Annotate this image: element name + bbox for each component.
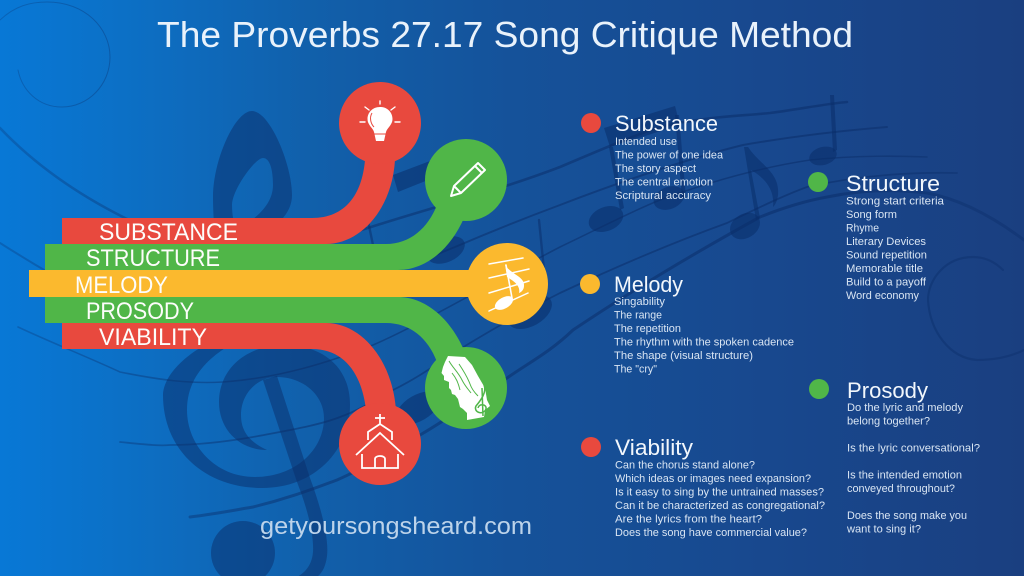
band: substance <box>62 160 395 246</box>
panel: structure: Literary Devices <box>846 236 927 248</box>
panel: prosody: Is the intended emotion <box>847 470 962 482</box>
band: structure <box>45 205 464 272</box>
panel: structure: Structure <box>846 171 940 196</box>
panel: prosody: Prosody <box>847 378 928 403</box>
panel: structure: Sound repetition <box>846 250 927 262</box>
panel: structure: Strong start criteria <box>846 196 945 208</box>
panel: prosody: Is the lyric conversational? <box>847 442 980 454</box>
panel: prosody: Do the lyric and melody <box>847 402 963 414</box>
panel: structure: Memorable title <box>846 263 923 275</box>
band: viability <box>62 323 396 410</box>
panel: melody: The shape (visual structure) <box>614 350 753 362</box>
panel: viability: Does the song have commercial value? <box>615 527 807 539</box>
panel: viability: Are the lyrics from the heart? <box>615 514 762 526</box>
treble clef <box>163 111 350 576</box>
panel: prosody: Does the song make you <box>847 510 967 522</box>
panel: structure: Rhyme <box>846 222 879 234</box>
icon: church <box>339 403 421 485</box>
panel: substance: The power of one idea <box>615 150 724 162</box>
panel: prosody <box>809 378 980 536</box>
panel: substance: Scriptural accuracy <box>615 190 711 202</box>
panel: substance: The central emotion <box>615 176 713 188</box>
panel: substance: The story aspect <box>615 163 696 175</box>
panel: viability <box>581 435 825 539</box>
panel: viability: Which ideas or images need expansion? <box>615 473 811 485</box>
footer url: getyoursongsheard.com <box>260 513 532 540</box>
panel: structure <box>808 171 945 302</box>
icon: singers with clef <box>425 347 507 429</box>
panel: substance: Substance <box>615 111 718 136</box>
background notes <box>391 95 839 431</box>
panel: melody: The rhythm with the spoken cadence <box>614 336 794 348</box>
band: prosody <box>45 297 464 362</box>
panel: prosody: conveyed throughout? <box>847 483 955 495</box>
panel: structure: Song form <box>846 209 897 221</box>
label: melody: MELODY <box>75 272 168 299</box>
label: prosody: PROSODY <box>86 298 194 325</box>
panel: prosody: belong together? <box>847 416 930 428</box>
panel: substance: Intended use <box>615 136 677 148</box>
panel: viability: Can the chorus stand alone? <box>615 460 755 472</box>
icon: light bulb <box>339 82 421 164</box>
band: melody <box>29 270 480 299</box>
panel: melody: The repetition <box>614 323 681 335</box>
label: viability: VIABILITY <box>99 324 207 351</box>
panel: prosody: want to sing it? <box>846 524 921 536</box>
icon: music note <box>466 243 548 325</box>
panel: melody: Singability <box>614 296 666 308</box>
panel: viability: Can it be characterized as congregational? <box>615 500 825 512</box>
icon: pencil <box>425 139 507 221</box>
panel: structure: Build to a payoff <box>846 276 927 288</box>
panel: melody: Melody <box>614 272 683 297</box>
panel: structure: Word economy <box>846 290 919 302</box>
label: substance: SUBSTANCE <box>99 219 238 246</box>
panel: melody <box>580 272 794 376</box>
panel: viability: Viability <box>615 435 693 460</box>
panel: melody: The range <box>614 310 662 322</box>
panel: melody: The "cry" <box>614 364 657 376</box>
panel: substance <box>581 111 724 202</box>
label: structure: STRUCTURE <box>86 245 220 272</box>
panel: viability: Is it easy to sing by the untrained masses? <box>615 486 824 498</box>
title: The Proverbs 27.17 Song Critique Method <box>157 14 853 55</box>
